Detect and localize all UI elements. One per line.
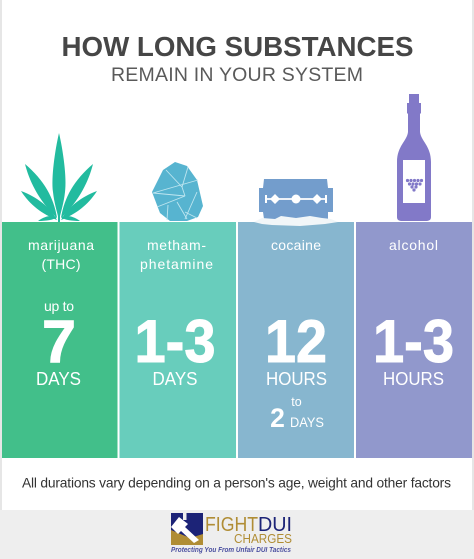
column: cocaine: 2	[270, 403, 285, 433]
icon: marijuana leaf	[21, 133, 97, 222]
column: methamphetamine	[120, 222, 236, 458]
title: HOW LONG SUBSTANCES	[62, 31, 414, 62]
cocaine powder	[254, 216, 338, 226]
column: methamphetamine: DAYS	[152, 369, 198, 389]
logo: gavel mark	[171, 513, 203, 545]
column: cocaine: HOURS	[266, 369, 327, 389]
column: methamphetamine: 1-3	[134, 308, 216, 375]
column: cocaine	[238, 222, 354, 458]
column: marijuana: DAYS	[36, 369, 81, 389]
icon: razor blade	[259, 179, 333, 219]
column: cocaine: 12	[265, 308, 327, 375]
column: cocaine: to	[291, 395, 302, 409]
column: alcohol: 1-3	[373, 308, 454, 375]
footer band	[0, 510, 474, 559]
title: REMAIN IN YOUR SYSTEM	[111, 64, 363, 86]
column: cocaine: cocaine	[271, 237, 321, 253]
icon: meth crystal	[152, 162, 203, 221]
title	[62, 31, 414, 86]
column: methamphetamine: metham-	[147, 237, 206, 253]
column: marijuana: up to	[44, 298, 74, 314]
footnote: All durations vary depending on a person's age, weight and other factors	[22, 476, 451, 490]
logo: wordmark: DUI	[258, 514, 292, 536]
column: marijuana: (THC)	[42, 256, 80, 272]
column: alcohol: alcohol	[389, 237, 438, 253]
column: methamphetamine: phetamine	[140, 256, 213, 272]
icon: wine bottle	[397, 94, 431, 221]
column: cocaine: DAYS	[290, 414, 324, 430]
column: alcohol: HOURS	[383, 369, 444, 389]
logo: wordmark	[171, 514, 292, 554]
logo: wordmark: Protecting You From Unfair DUI Tactics	[171, 545, 291, 554]
column: marijuana: 7	[42, 308, 76, 375]
logo: wordmark: CHARGES	[234, 531, 292, 546]
column: marijuana: marijuana	[28, 237, 94, 253]
column: marijuana	[2, 222, 118, 458]
column: alcohol	[356, 222, 472, 458]
logo: wordmark: FIGHT	[205, 514, 258, 536]
